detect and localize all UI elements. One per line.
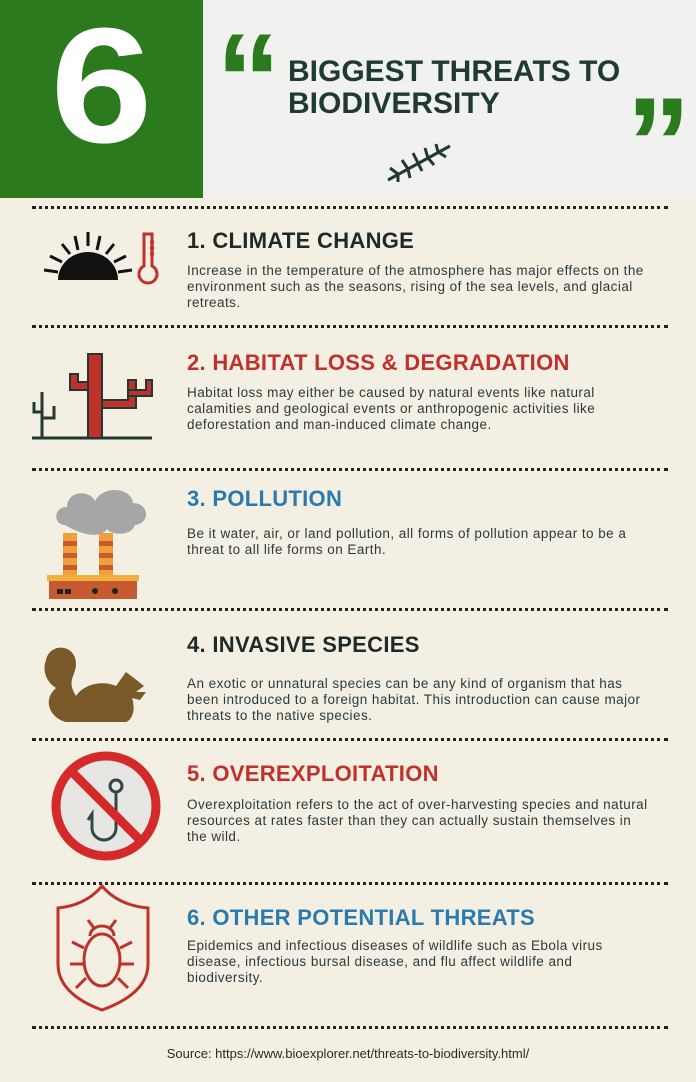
text 4: An exotic or unnatural species can be any kind of organism that has been introduced to a foreign habitat. This introduction can cause major threats to the native species. xyxy=(187,676,640,723)
icon: squirrel xyxy=(44,648,146,722)
icon: no fishing xyxy=(52,752,160,860)
text 6: Epidemics and infectious diseases of wildlife such as Ebola virus disease, infectious bursal disease, and flu affect wildlife and biodiversity. xyxy=(187,938,603,985)
heading 1: 1. CLIMATE CHANGE xyxy=(187,228,414,253)
header background xyxy=(0,0,696,198)
heading 2: 2. HABITAT LOSS & DEGRADATION xyxy=(187,350,570,375)
icon: shield bug xyxy=(56,884,150,1012)
title: BIODIVERSITY xyxy=(288,87,500,120)
icon: open quote: “ xyxy=(216,6,281,152)
title: BIGGEST THREATS TO xyxy=(288,55,620,88)
heading 6: 6. OTHER POTENTIAL THREATS xyxy=(187,905,535,930)
title xyxy=(288,55,620,120)
icon: sun & thermometer xyxy=(44,232,158,284)
icon: leaf xyxy=(387,144,451,182)
text 3: Be it water, air, or land pollution, all forms of pollution appear to be a threat to all life forms on Earth. xyxy=(187,526,626,557)
text 1: Increase in the temperature of the atmosphere has major effects on the environment such as the seasons, rising of the sea levels, and glacial retreats. xyxy=(187,263,644,310)
heading 4: 4. INVASIVE SPECIES xyxy=(187,632,420,657)
text 2: Habitat loss may either be caused by natural events like natural calamities and geological events or anthropogenic activities like deforestation and man-induced climate change. xyxy=(187,385,595,432)
icon: factory xyxy=(47,490,146,599)
heading 3: 3. POLLUTION xyxy=(187,486,342,511)
source: Source: https://www.bioexplorer.net/threats-to-biodiversity.html/ xyxy=(167,1046,529,1061)
icon: close quote: ” xyxy=(626,70,691,216)
text 5: Overexploitation refers to the act of over-harvesting species and natural resources at rates faster than they can actually sustain themselves in the wild. xyxy=(187,797,648,844)
big number block xyxy=(0,0,203,198)
icon: cactus xyxy=(32,353,153,440)
heading 5: 5. OVEREXPLOITATION xyxy=(187,761,439,786)
